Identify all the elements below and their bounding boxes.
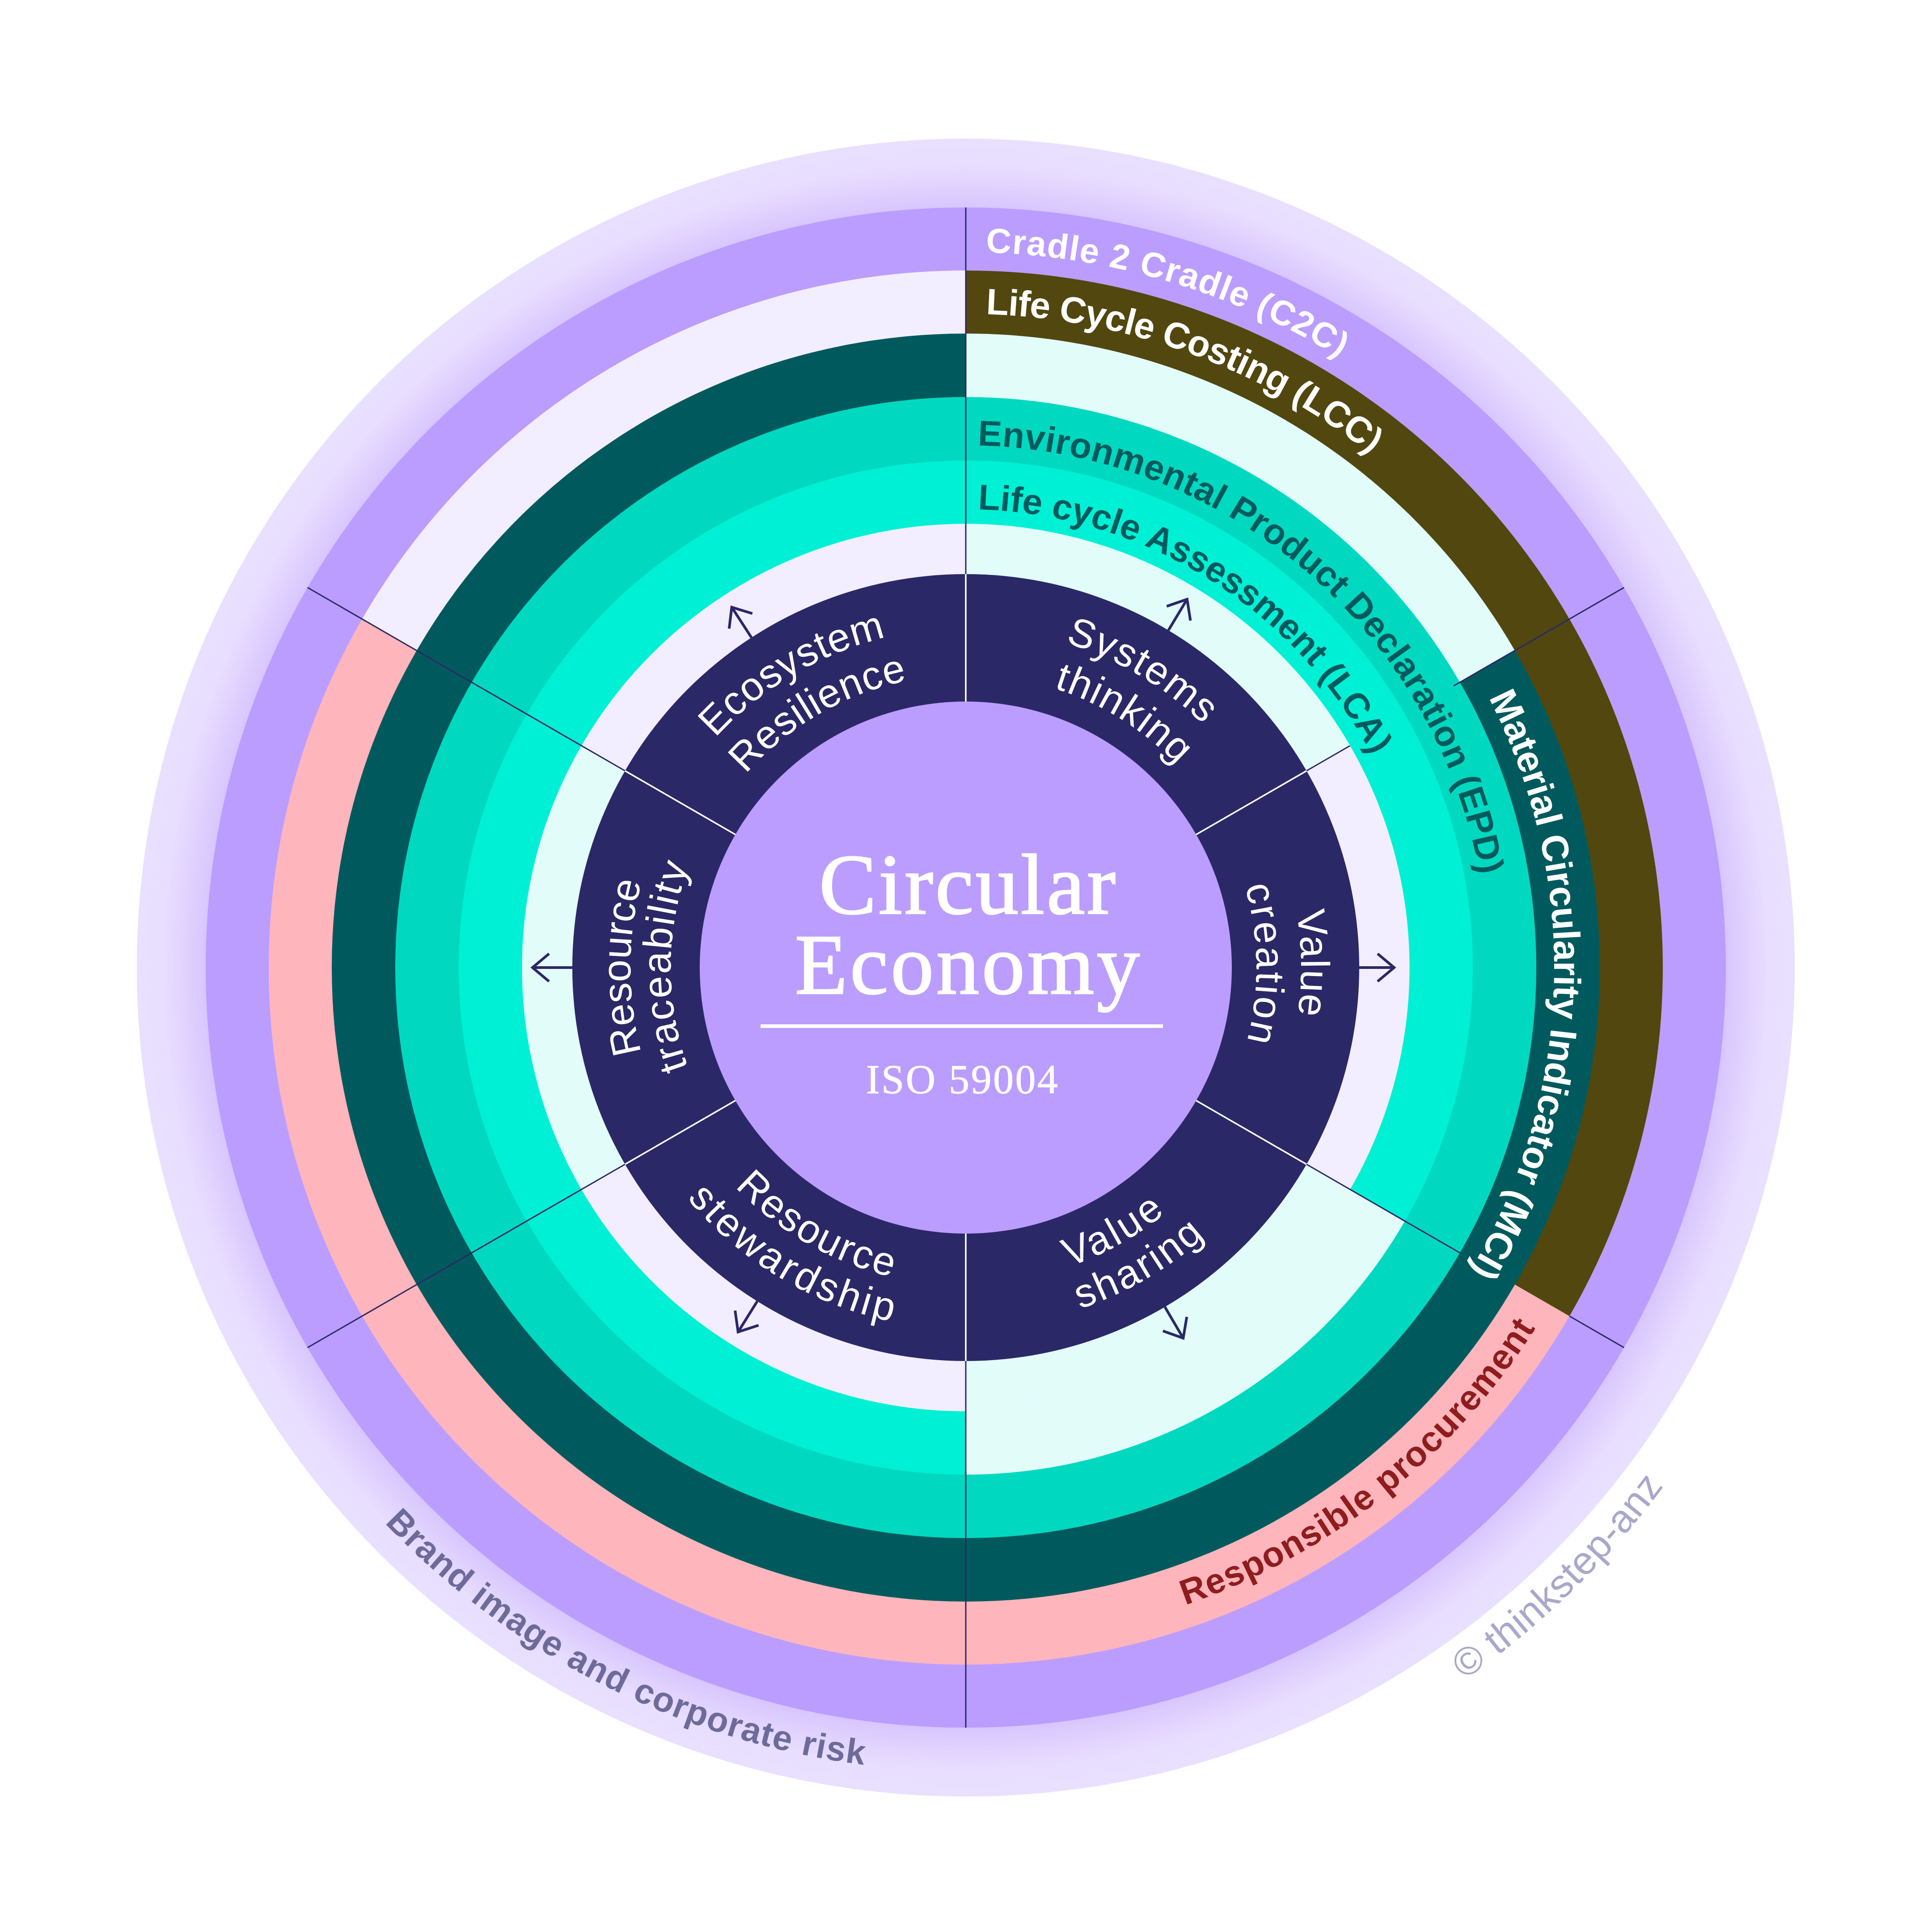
title: [795, 837, 1140, 1012]
principle: Value sharing: Value: [1050, 1180, 1177, 1276]
principle: Systems thinking: [1040, 608, 1239, 777]
principle: Value sharing: [1050, 1180, 1220, 1318]
principle: Value creation: creation: [1198, 876, 1326, 1060]
principle: Resource traceability: Resource: [560, 864, 691, 1062]
principle: Resource traceability: traceability: [583, 843, 760, 1080]
label: Brand image and corporate risk: Brand image and corporate risk: [379, 1381, 885, 1898]
title: Circular: [819, 837, 1116, 932]
label: Life Cycle Costing: Life Cycle Costing (LCC): [981, 282, 1395, 461]
credit: thinkstep-anz: © thinkstep-anz: [1419, 1457, 1697, 1687]
principle: Ecosystem Resilience: Resilience: [719, 602, 926, 819]
label: Environmental Product Declaration: Environmental Product Declaration (EPD): [968, 413, 1522, 877]
title: Economy: [795, 917, 1140, 1012]
title underline: [761, 1024, 1163, 1028]
principle: Value creation: [1198, 876, 1351, 1060]
ring: procurement and life cycle costing: [269, 271, 1663, 1665]
ring: environmental product declaration: [395, 397, 1536, 1538]
subtitle: standard: ISO 59004: [866, 1057, 1058, 1102]
principle: Ecosystem Resilience: Ecosystem: [689, 560, 904, 782]
ring: six principles: [572, 574, 1359, 1361]
principle: Resource stewardship: [680, 1129, 917, 1382]
label: Life cycle Assessment: Life cycle Assessment (LCA): [971, 477, 1407, 760]
principle: Systems thinking: thinking: [1040, 654, 1214, 777]
arrow: Value sharing: [1153, 1300, 1195, 1345]
arrow: Resource traceability: [533, 954, 572, 981]
label: Responsible procurement: Responsible procurement: [1128, 1302, 1591, 1613]
arrow: Systems thinking: [1157, 592, 1199, 638]
ring: material circularity indicator: [332, 334, 1600, 1602]
principle: Resource stewardship: Resource: [727, 1129, 917, 1322]
principle: Value sharing: sharing: [1059, 1204, 1220, 1318]
outer glow ring: [137, 139, 1795, 1797]
arrow: Ecosystem Resilience: [720, 600, 763, 645]
arrow: Value creation: [1359, 954, 1394, 981]
principle: Value creation: Value: [1272, 905, 1351, 1026]
ring: arrow zone: [522, 524, 1409, 1411]
label: Cradle 2 Cradle: Cradle 2 Cradle (C2C): [983, 220, 1359, 365]
label: Material Circularity Indicator: Material Circularity Indicator (MCI): [1237, 682, 1762, 1298]
principle: Ecosystem Resilience: [689, 560, 926, 819]
principle: Resource traceability: [560, 843, 760, 1080]
centre disc: [700, 702, 1232, 1234]
arrow: Resource stewardship: [726, 1294, 769, 1339]
principle: Resource stewardship: stewardship: [680, 1129, 917, 1382]
principle: Systems thinking: Systems: [1052, 608, 1239, 736]
ring: brand image and corporate risk: [206, 207, 1726, 1728]
ring: life cycle assessment: [459, 461, 1473, 1475]
